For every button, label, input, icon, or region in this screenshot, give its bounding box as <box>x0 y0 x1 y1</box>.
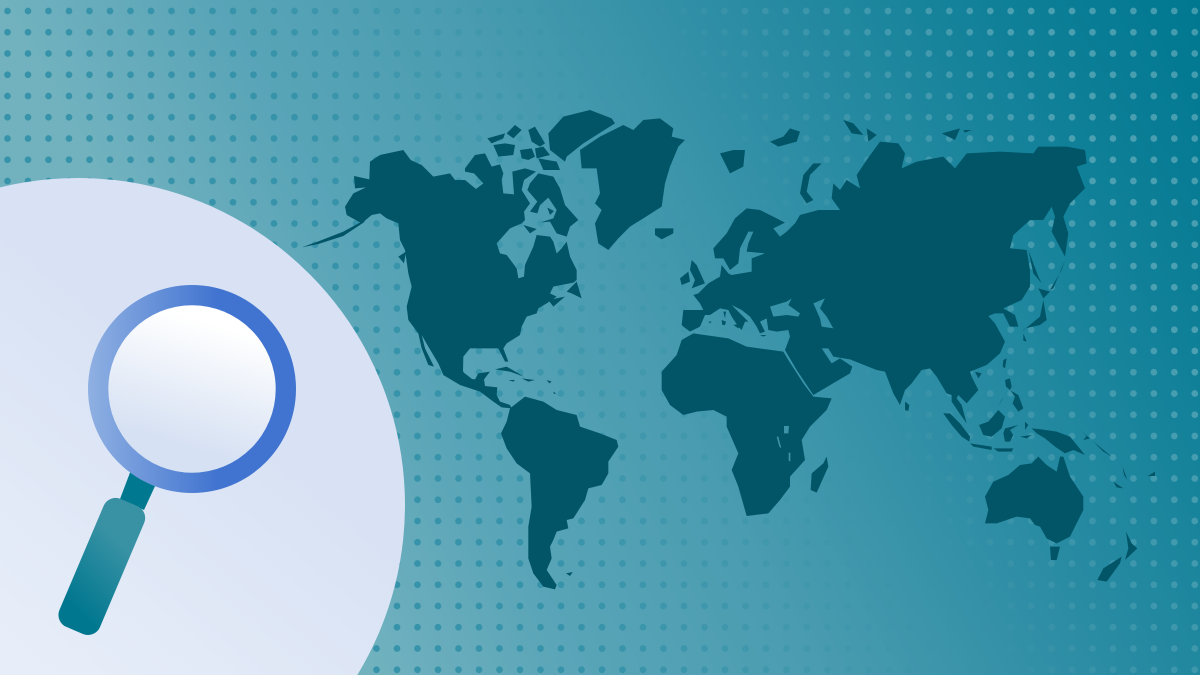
Falkland Islands <box>566 572 573 576</box>
New Guinea <box>1032 428 1085 455</box>
British Isles <box>680 260 705 288</box>
Canadian Arctic islands <box>487 125 578 237</box>
small Arctic islands <box>487 125 560 233</box>
Americas north and Greenland <box>302 110 685 383</box>
Melanesia <box>1080 430 1155 488</box>
lens glass <box>108 305 276 473</box>
Oceania <box>905 402 1155 582</box>
African lakes <box>777 426 790 462</box>
Eurasian landmass <box>682 142 1087 423</box>
Iceland <box>655 228 673 239</box>
South America, Central America and Africa <box>443 333 832 589</box>
Tasmania <box>1050 547 1060 560</box>
Arctic islands of Eurasia <box>720 120 972 203</box>
Greenland <box>580 118 685 250</box>
Newfoundland and Nova Scotia <box>548 282 582 307</box>
Aleutian islands <box>302 222 365 247</box>
handle neck <box>120 470 156 510</box>
dark dot pattern <box>4 8 830 674</box>
icon: magnifying glass <box>54 285 296 639</box>
Indonesia, Philippines and Taiwan <box>943 358 1032 452</box>
Ellesmere Island <box>548 110 615 162</box>
North America <box>345 150 577 383</box>
South America <box>501 397 618 589</box>
Caribbean islands <box>495 367 556 394</box>
light dot pattern <box>702 8 1198 673</box>
Japan and Sakhalin <box>975 250 1065 378</box>
Africa <box>662 333 832 516</box>
lens ring <box>88 285 296 493</box>
large pale circle <box>0 178 405 675</box>
handle grip <box>54 494 149 639</box>
Madagascar <box>811 457 828 493</box>
New Zealand <box>1097 532 1137 582</box>
Australia <box>985 457 1083 543</box>
Mediterranean islands <box>708 312 767 337</box>
world map <box>302 110 1155 589</box>
Baffin Island <box>527 173 578 237</box>
Sri Lanka <box>905 402 909 411</box>
Vancouver Island <box>398 252 406 263</box>
Eurasia <box>655 120 1087 423</box>
Southeast Asian islands <box>943 358 1085 455</box>
Central America <box>443 368 512 408</box>
